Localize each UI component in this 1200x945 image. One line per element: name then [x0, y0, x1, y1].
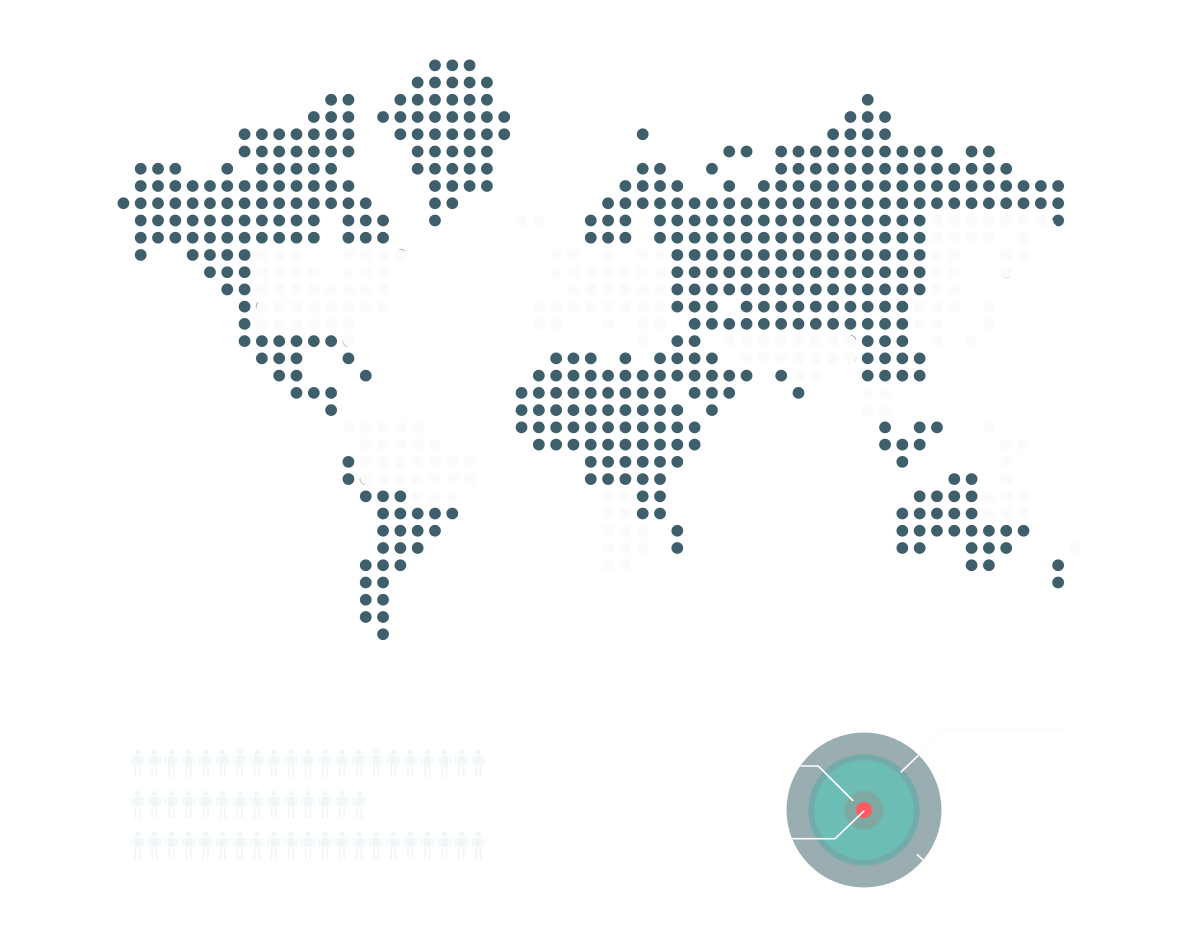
- leader line: lower right: [917, 854, 923, 860]
- world map dot matrix: [123, 65, 1076, 634]
- map dots: [123, 65, 1076, 634]
- inner grey disc: [845, 791, 883, 829]
- leader line: lower left: [792, 811, 864, 839]
- outer ring: [786, 732, 942, 888]
- faded map dots: [262, 220, 1076, 565]
- faint leader line extension: [918, 729, 1068, 756]
- red core: [856, 802, 872, 818]
- people row 3: [131, 832, 485, 859]
- leader line: upper right: [901, 756, 918, 772]
- concentric circle diagram: [786, 729, 1068, 888]
- dot edge slivers: [256, 220, 1056, 485]
- leader line: upper left: [801, 766, 853, 801]
- people row 2: [131, 791, 366, 818]
- highlighted map dots: [123, 65, 1058, 634]
- middle ring: [808, 754, 920, 866]
- teal disc: [814, 760, 914, 860]
- people row 1: [131, 750, 485, 777]
